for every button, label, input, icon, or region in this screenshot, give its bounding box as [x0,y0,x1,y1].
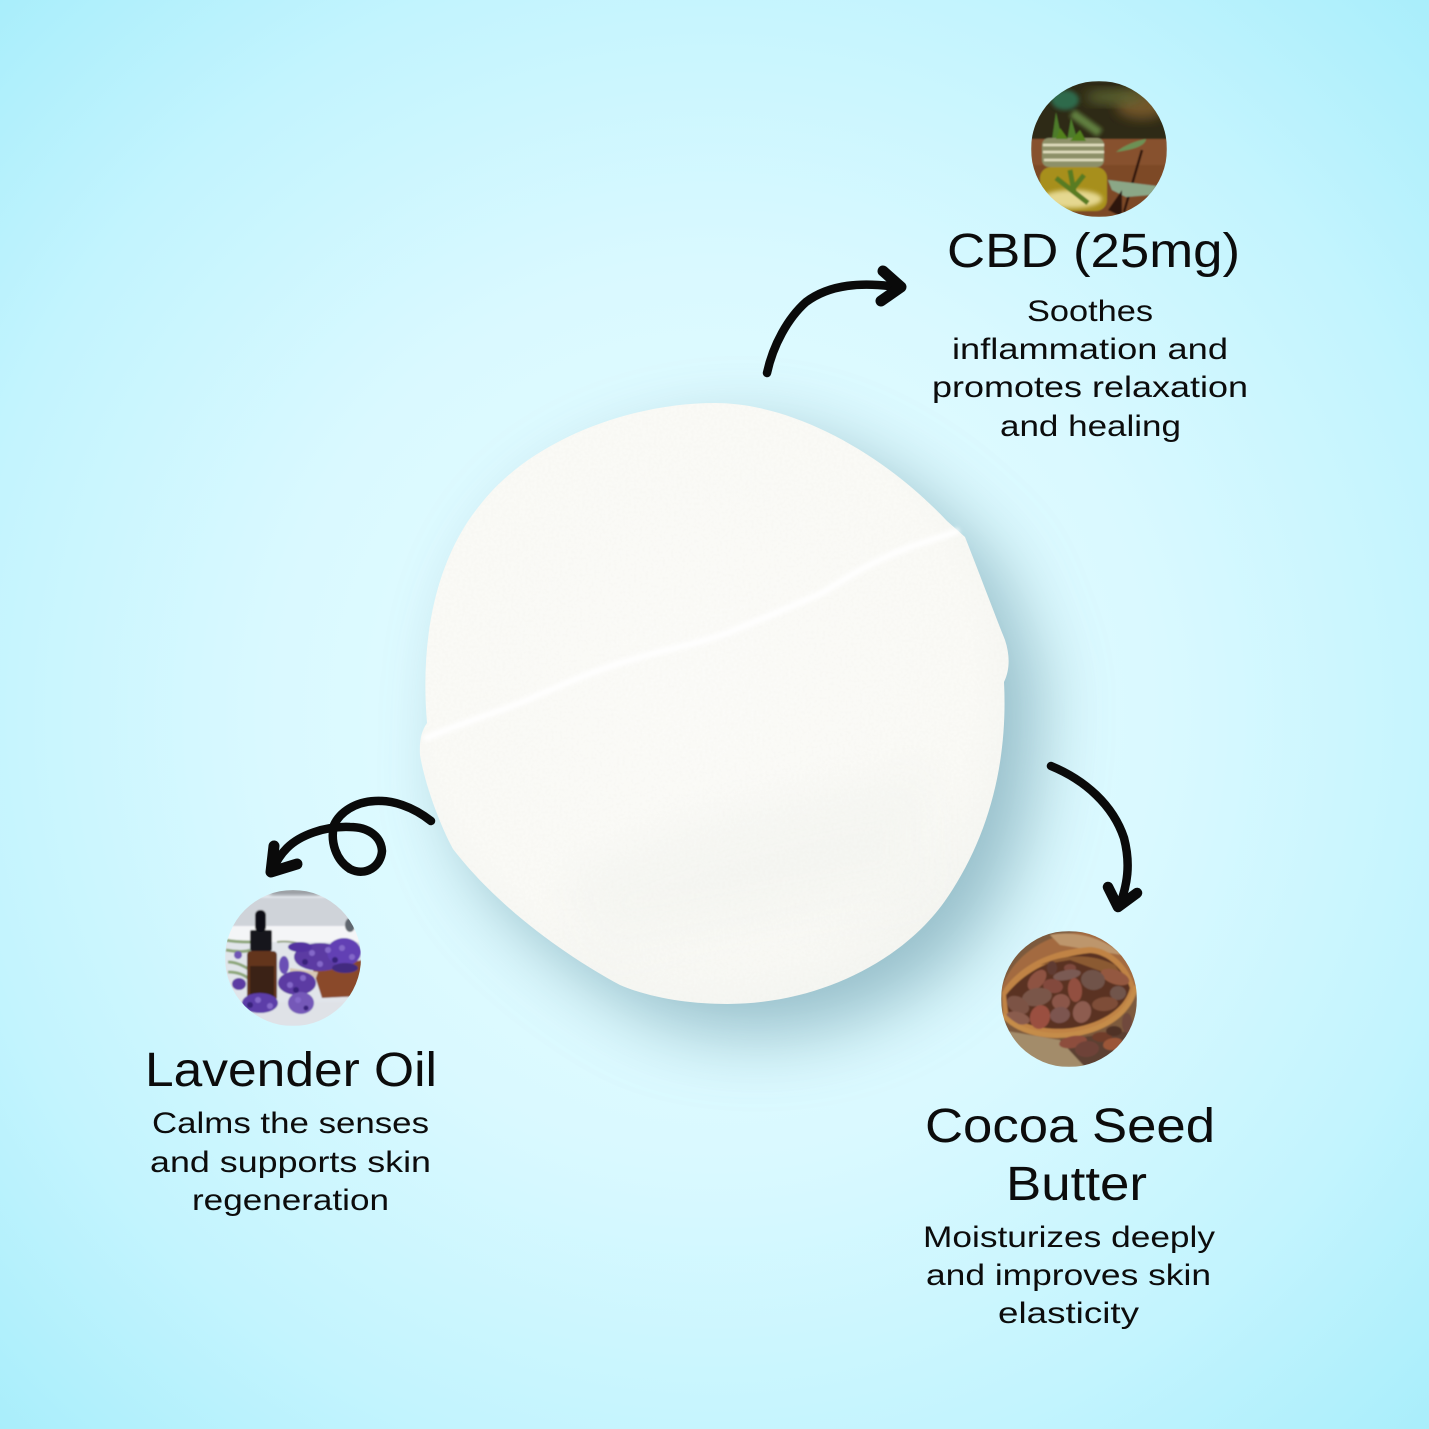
bath bomb [415,400,1041,1034]
wood bowl [313,960,362,998]
heading: lavender oil: Lavender Oil [145,1044,437,1097]
icon: cocoa beans photo [1001,931,1137,1067]
text: CBD description: Soothes [1027,295,1153,328]
heading: CBD: CBD (25mg) [947,225,1240,278]
text: CBD description [932,295,1248,443]
text: cocoa description: Moisturizes deeply [923,1221,1215,1254]
heading: cocoa seed butter: Cocoa Seed [925,1100,1215,1153]
text: cocoa description: and improves skin [926,1259,1211,1292]
arrow: bomb to CBD [767,271,901,373]
text: CBD description: inflammation and [952,333,1228,366]
heading: cocoa seed butter [925,1100,1215,1211]
ingredient: CBD [932,225,1248,443]
arrow: bomb to cocoa butter [1051,766,1137,907]
text: cocoa description [923,1221,1215,1330]
bomb shading and texture [415,400,1015,1010]
bottle [247,951,277,1001]
text: lavender description: Calms the senses [152,1107,429,1140]
text: lavender description: regeneration [192,1184,389,1217]
heading: cocoa seed butter: Butter [1006,1158,1147,1211]
icon: lavender oil photo [225,889,362,1026]
lavender flowers [232,938,361,1014]
text: cocoa description: elasticity [998,1297,1139,1330]
icon: CBD oil jar photo [1031,81,1168,217]
ingredient: lavender oil [145,1044,437,1217]
text: CBD description: and healing [1000,410,1181,443]
arrow: bomb to lavender [271,801,431,872]
ingredient: cocoa seed butter [923,1100,1215,1330]
text: CBD description: promotes relaxation [932,371,1248,404]
text: lavender description [150,1107,431,1217]
bomb seam [424,531,959,739]
bomb body [420,403,1009,1004]
text: lavender description: and supports skin [150,1146,431,1179]
